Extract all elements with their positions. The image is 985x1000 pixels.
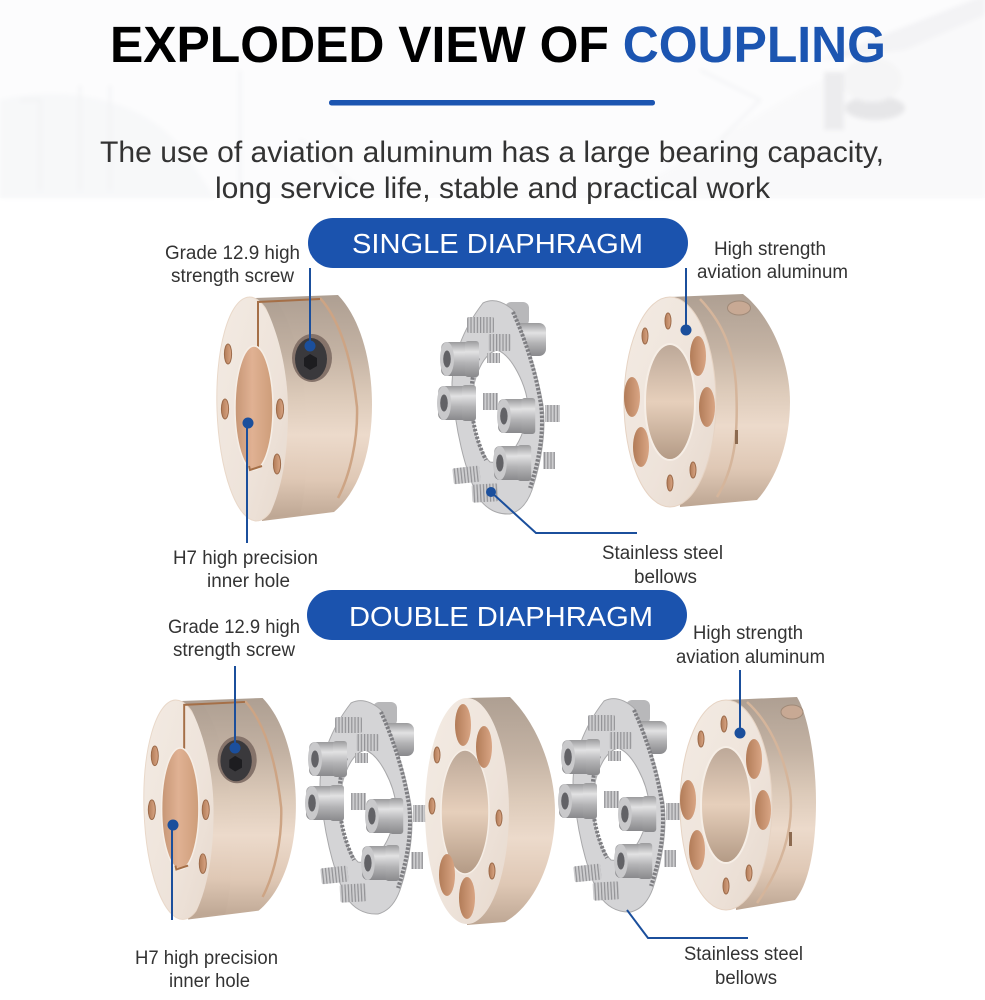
callout: aluminum single: [680, 239, 848, 336]
callout: aluminum single: aviation aluminum: [697, 262, 848, 283]
callout: bellows double: bellows: [715, 968, 777, 989]
bellows: single: [437, 301, 560, 514]
callout: inner hole double: inner hole: [169, 971, 250, 992]
callout: bellows single: Stainless steel: [602, 543, 723, 564]
callout: aluminum double: High strength: [693, 623, 803, 644]
heading pill: single diaphragm: SINGLE DIAPHRAGM: [352, 228, 643, 259]
callout: inner hole single: inner hole: [207, 571, 290, 592]
heading pill: single diaphragm: [308, 218, 688, 268]
heading pill: double diaphragm: DOUBLE DIAPHRAGM: [349, 601, 653, 632]
callout: screw double: strength screw: [173, 640, 295, 661]
callout: screw double: Grade 12.9 high: [168, 617, 300, 638]
callout: aluminum double: [676, 623, 825, 738]
callout: bellows single: bellows: [634, 567, 697, 588]
callout: screw single: [165, 243, 316, 352]
spacer ring: double: [425, 697, 555, 925]
title underline: [329, 100, 655, 106]
callout: inner hole single: H7 high precision: [173, 548, 318, 569]
callout: screw double: [168, 617, 300, 754]
callout: inner hole double: [135, 820, 278, 992]
aluminum hub: single: [624, 294, 790, 507]
clamp hub: double: [140, 698, 296, 921]
subtitle: [100, 136, 884, 205]
callout: bellows single: [486, 487, 723, 588]
callout: bellows double: Stainless steel: [684, 944, 803, 965]
callout: inner hole double: H7 high precision: [135, 948, 278, 969]
header background: [0, 0, 985, 198]
aluminum hub: double: [680, 697, 816, 910]
callout: aluminum double: aviation aluminum: [676, 647, 825, 668]
title: EXPLODED VIEW OF COUPLING: [110, 16, 886, 73]
clamp hub: single: [213, 295, 372, 522]
subtitle: long service life, stable and practical work: [215, 172, 771, 205]
bellows: double right: [558, 699, 681, 912]
callout: bellows double: [627, 910, 803, 989]
callout: inner hole single: [173, 418, 318, 592]
subtitle: The use of aviation aluminum has a large bearing capacity,: [100, 136, 884, 169]
callout: screw single: strength screw: [171, 266, 294, 287]
heading pill: double diaphragm: [307, 590, 687, 640]
bellows: double left: [305, 701, 428, 914]
callout: screw single: Grade 12.9 high: [165, 243, 300, 264]
callout: aluminum single: High strength: [714, 239, 826, 260]
